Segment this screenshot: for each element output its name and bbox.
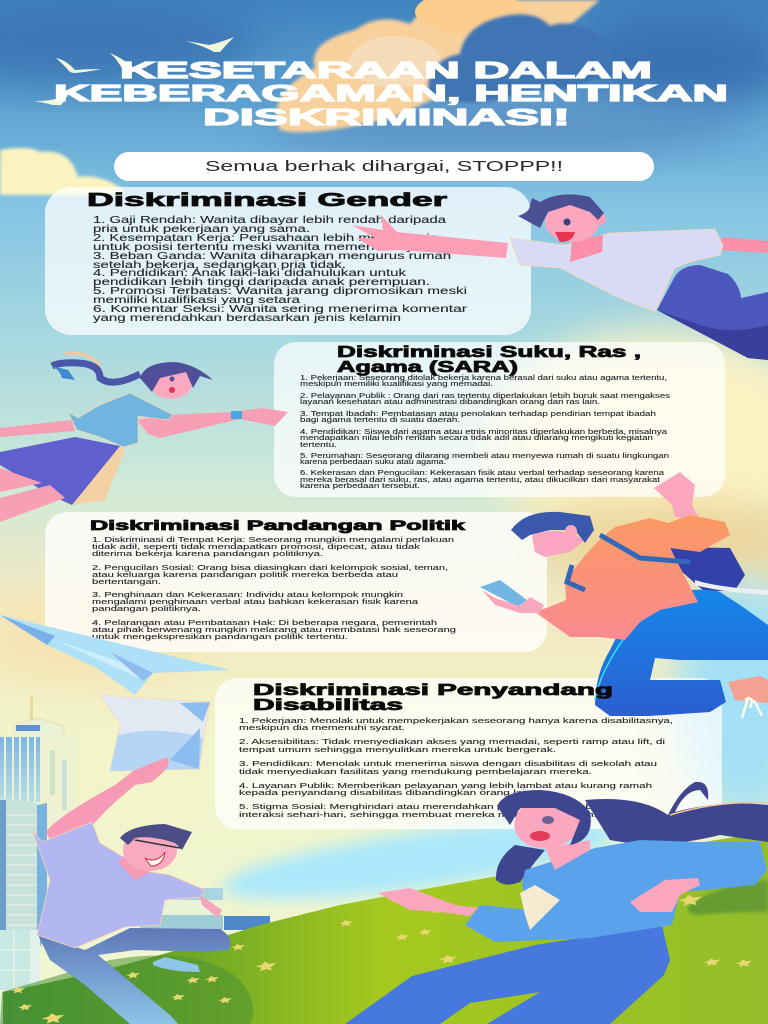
heading: disabilitas: Disabilitas: [253, 697, 403, 714]
tee: [510, 229, 723, 312]
blouse: [68, 393, 173, 447]
text block: disabilitas list: tempat umum sehingga menyulitkan mereka untuk bergerak.: [239, 745, 556, 754]
illustration: man with glasses: [32, 757, 230, 1024]
trousers: [657, 265, 768, 360]
text block: politik list: 1. Diskriminasi di Tempat Kerja: Seseorang mungkin mengalami perlakuan: [92, 535, 454, 544]
heading: disabilitas: [253, 682, 613, 714]
head: [545, 202, 599, 242]
illustration: long-haired girl: [345, 782, 768, 1024]
text block: SARA list: 2. Pelayanan Publik : Orang dari ras tertentu diperlakukan lebih buruk saat mengakses: [300, 393, 671, 400]
text block: politik list: 3. Penghinaan dan Kekerasan: Individu atau kelompok mungkin: [92, 590, 403, 599]
title: KESETARAAN DALAM: [120, 57, 652, 83]
text block: gender list: 3. Beban Ganda: Wanita diharapkan mengurus rumah: [93, 251, 451, 262]
text block: gender list: 6. Komentar Seksi: Wanita sering menerima komentar: [93, 304, 468, 315]
illustration: paper plane: [0, 615, 230, 695]
title: [54, 57, 728, 130]
text block: gender list: 1. Gaji Rendah: Wanita dibayar lebih rendah daripada: [93, 215, 447, 226]
legs: [0, 468, 42, 492]
illustration: grass hill: [0, 832, 768, 1024]
heading: gender: Diskriminasi Gender: [87, 190, 447, 210]
text block: gender list: pria untuk pekerjaan yang sama.: [93, 224, 310, 235]
text block: SARA list: 4. Pendidikan: Siswa dari agama atau etnis minoritas diperlakukan berbeda, misalnya: [300, 429, 667, 436]
trousers: [595, 590, 768, 716]
text block: gender list: untuk posisi tertentu meski wanita memenuhi syarat: [93, 242, 440, 253]
text block: disabilitas list: 2. Aksesibilitas: Tidak menyediakan akses yang memadai, seperti ramp atau lift, di: [239, 737, 665, 746]
hair flowing: [585, 782, 768, 844]
illustration: flying boy in white tee: [352, 194, 768, 360]
text block: disabilitas list: kepada penyandang disabilitas dibandingkan orang lain.: [239, 788, 535, 797]
illustration: sheet of paper: [100, 695, 210, 771]
text block: disabilitas list: tidak menyediakan fasilitas yang mendukung pembelajaran mereka.: [239, 767, 592, 776]
text block: SARA list: tertentu.: [300, 442, 337, 449]
head: [123, 829, 177, 871]
trousers: [345, 925, 670, 1024]
illustration: boy with backpack and phone: [480, 472, 768, 718]
text block: politik list: 4. Pelarangan atau Pembatasan Hak: Di beberapa negara, pemerintah: [92, 618, 437, 627]
text block: disabilitas list: [239, 716, 673, 819]
text block: disabilitas list: 4. Layanan Publik: Memberikan pelayanan yang lebih lambat atau kurang ramah: [239, 781, 652, 790]
head: [150, 367, 192, 399]
text block: gender list: pendidikan lebih tinggi daripada anak perempuan.: [93, 277, 430, 288]
heading: SARA: Agama (SARA): [337, 359, 518, 376]
text block: SARA list: 5. Perumahan: Seseorang dilarang membeli atau menyewa rumah di suatu lingkungan: [300, 453, 669, 460]
neck: [118, 855, 150, 880]
text block: gender list: setelah bekerja, sedangkan pria tidak.: [93, 260, 346, 271]
text block: SARA list: karena perbedaan suku atau agama.: [300, 459, 446, 466]
phone: [480, 580, 527, 607]
text block: politik list: mengalami penghinaan verbal atau bahkan kekerasan fisik karena: [92, 597, 419, 606]
text block: gender list: 4. Pendidikan: Anak laki-laki didahulukan untuk: [93, 268, 406, 279]
subtitle pill: [114, 152, 654, 181]
text block: SARA list: 6. Kekerasan dan Pengucilan: Kekerasan fisik atau verbal terhadap seseorang karena: [300, 470, 664, 477]
text block: politik list: [92, 535, 456, 641]
text block: disabilitas list: 5. Stigma Sosial: Menghindari atau merendahkan penyandang disabilitas dalam: [239, 802, 650, 811]
text block: politik list: untuk mengekspresikan pandangan politik tertentu.: [92, 632, 348, 641]
text block: SARA list: karena perbedaan tersebut.: [300, 483, 420, 490]
panel: Diskriminasi Gender: [45, 187, 531, 335]
text block: SARA list: mereka berasal dari suku, ras, atau agama tertentu, atau dikucilkan dari masyarakat: [300, 477, 660, 484]
panel: Diskriminasi SARA: [274, 342, 725, 497]
text block: gender list: 2. Kesempatan Kerja: Perusahaan lebih memilih pria: [93, 233, 439, 244]
text block: disabilitas list: 3. Pendidikan: Menolak untuk menerima siswa dengan disabilitas di sekolah atau: [239, 759, 657, 768]
text block: SARA list: [300, 375, 671, 490]
text block: disabilitas list: 1. Pekerjaan: Menolak untuk mempekerjakan seseorang hanya karena disabilitasnya,: [239, 716, 673, 725]
hair: [120, 824, 192, 850]
text block: SARA list: 3. Tempat Ibadah: Pembatasan atau penolakan terhadap pendirian tempat ibadah: [300, 411, 656, 418]
neck: [545, 840, 590, 870]
hair top: [497, 790, 591, 845]
text block: SARA list: mendapatkan nilai lebih rendah secara tidak adil atau dilarang mengikuti kegiatan: [300, 435, 653, 442]
raised fist: [654, 472, 700, 520]
clouds: [0, 0, 768, 195]
text block: gender list: 5. Promosi Terbatas: Wanita jarang dipromosikan meski: [93, 286, 467, 297]
text block: politik list: tidak adil, seperti tidak mendapatkan promosi, dipecat, atau tidak: [92, 542, 421, 551]
text block: disabilitas list: interaksi sehari-hari, sehingga membuat mereka merasa dikucilkan.: [239, 810, 597, 819]
illustration: girl with ponytail: [0, 353, 288, 522]
right arm: [718, 237, 768, 253]
heading: SARA: [337, 344, 641, 376]
shoe: [153, 957, 200, 972]
title: KEBERAGAMAN, HENTIKAN: [54, 80, 728, 106]
shoe: [728, 676, 768, 703]
heading: disabilitas: Diskriminasi Penyandang: [253, 682, 613, 699]
hand: [482, 590, 544, 613]
illustration: city buildings: [0, 695, 270, 990]
neck and head: [532, 531, 585, 557]
heading: SARA: Diskriminasi Suku, Ras ,: [337, 344, 641, 361]
text block: gender list: yang merendahkan berdasarkan jenis kelamin: [93, 313, 401, 324]
text block: politik list: diterima bekerja karena pandangan politiknya.: [92, 549, 323, 558]
text block: gender list: [93, 215, 468, 324]
ponytail: [52, 363, 140, 382]
text block: politik list: 2. Pengucilan Sosial: Orang bisa diasingkan dari kelompok sosial, teman,: [92, 563, 448, 572]
jeans: [38, 928, 230, 1024]
hands: [378, 888, 478, 916]
text block: disabilitas list: meskipun dia memenuhi syarat.: [239, 723, 405, 732]
text block: gender list: memiliki kualifikasi yang setara: [93, 295, 301, 306]
title: DISKRIMINASI!: [203, 104, 570, 130]
birds: [35, 37, 234, 105]
text block: politik list: bertentangan.: [92, 577, 161, 586]
text block: politik list: atau pihak berwenang mungkin melarang atau membatasi hak seseorang: [92, 625, 456, 634]
backpack: [670, 547, 745, 592]
shirt: [465, 840, 767, 942]
hair: [518, 194, 604, 228]
subtitle pill: Semua berhak dihargai, STOPPP!!: [205, 159, 563, 175]
text block: politik list: pandangan politiknya.: [92, 604, 201, 613]
ribbon mark: [742, 698, 762, 718]
text block: SARA list: 1. Pekerjaan: Seseorang ditolak bekerja karena berasal dari suku atau agama tertentu,: [300, 375, 667, 382]
text block: SARA list: layanan kesehatan atau administrasi dibandingkan orang dari ras lain.: [300, 399, 600, 406]
shirt: [32, 822, 205, 948]
arm: [46, 757, 168, 842]
arms: [0, 420, 75, 437]
neck: [570, 235, 603, 262]
text block: politik list: atau keluarga karena pandangan politik mereka berbeda atau: [92, 570, 398, 579]
panel: Diskriminasi Penyandang Disabilitas: [215, 678, 722, 829]
text block: SARA list: meskipun memiliki kualifikasi yang memadai.: [300, 381, 493, 388]
face: [509, 789, 587, 855]
hoodie: [535, 515, 730, 640]
panel: Diskriminasi Pandangan Politik: [45, 512, 547, 652]
skirt: [0, 437, 120, 505]
arm and hand: [352, 215, 508, 258]
heading: politik: Diskriminasi Pandangan Politik: [90, 518, 466, 533]
text block: SARA list: bagi agama tertentu di suatu daerah.: [300, 417, 460, 424]
